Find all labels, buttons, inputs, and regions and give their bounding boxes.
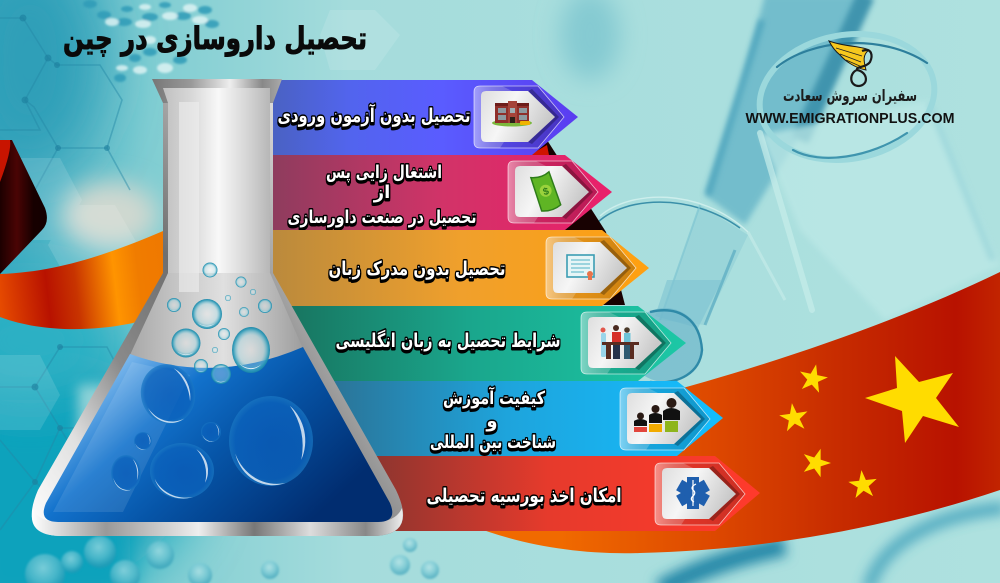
liquid [44,347,392,522]
card [581,312,671,374]
molecule helix [83,0,219,82]
banner 4: English instruction [260,306,686,381]
large star [865,356,959,443]
logo [746,41,954,127]
rim top [152,79,282,103]
banner 3: language certificate [260,230,649,306]
title: تحصیل داروسازی در چین [63,21,367,57]
icon: winged swan [829,41,871,86]
liquid reflection [53,362,190,512]
icon: certificate [567,255,594,280]
bottom spheres [25,536,439,583]
label: شناخت بین المللی [430,432,556,453]
card [620,388,710,450]
label: از [373,182,390,203]
small star 2 [778,401,810,432]
card [508,161,598,223]
Erlenmeyer flask [32,79,403,536]
brand name: سفیران سروش سعادت [783,86,917,105]
label [430,386,556,453]
label [288,162,476,228]
label: امکان اخذ بورسیه تحصیلی [426,485,622,507]
flag stars [778,356,959,499]
large test tube [750,21,1000,320]
card [474,86,564,148]
banner 1: entrance exam [260,80,578,155]
small star 4 [847,469,878,499]
label: و [485,411,498,432]
bubbles in liquid [111,358,313,499]
neck reflection [179,102,199,292]
China flag ribbon, left part [0,140,170,329]
label: تحصیل در صنعت داورسازی [288,207,476,228]
banner 5: quality and recognition [260,381,723,456]
label: تحصیل بدون آزمون ورودی [278,103,470,127]
small star 3 [799,444,834,479]
card [655,463,745,525]
round flask behind banners [628,280,722,382]
small star 1 [797,361,830,394]
label: تحصیل بدون مدرک زبان [328,258,506,280]
hexagon lattice [0,18,130,530]
icon: star of life [676,477,710,509]
small test tube [598,197,785,325]
China flag ribbon, right part [470,272,1000,553]
outer glass [32,100,403,536]
icon: banknote: $ [542,186,551,198]
icon: lab team at table [600,325,639,359]
icon: people on podium [634,398,680,432]
card [546,237,636,299]
banner 6: scholarship [260,456,760,531]
neck [163,88,270,275]
website: WWW.EMIGRATIONPLUS.COM [746,111,954,127]
label: شرایط تحصیل به زبان انگلیسی [336,329,560,352]
lower-right blurred glass [660,546,785,583]
icon: banknote [531,171,561,213]
shoulder glass [130,273,303,369]
bubbles above liquid [167,262,272,384]
banner 2: employment [260,155,612,230]
diagonal dark glass streak [705,0,865,225]
dark ribbon fold behind banners [525,140,625,305]
label: اشتغال زایی پس [326,162,442,183]
label: کیفیت آموزش [443,386,545,409]
base rim [32,508,403,536]
icon: school building [492,101,532,126]
